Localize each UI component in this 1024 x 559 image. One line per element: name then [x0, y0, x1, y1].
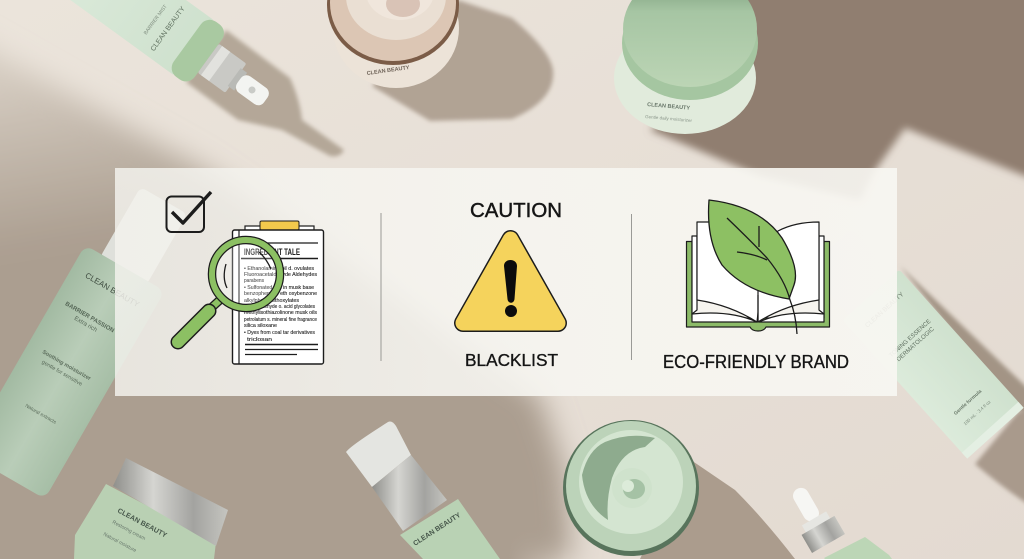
icon: open book with leaf [686, 200, 830, 334]
product: pump bottle, left: Natural extracts [24, 403, 58, 426]
product: airless bottle, bottom center: CLEAN BEAUTY [412, 512, 462, 548]
label: eco-friendly brand: ECO-FRIENDLY BRAND [663, 352, 849, 372]
book cover [686, 242, 830, 331]
clipboard sheet: methylisothiazolinone musk oils [244, 310, 317, 316]
product: tube bottle, right: 100 mL · 3.4 fl oz [963, 399, 992, 426]
product: silver lidded jar, bottom left [74, 458, 228, 559]
magnifying glass [178, 240, 280, 342]
product: beige cream jar, top [327, 0, 553, 121]
clipboard sheet: • Ethanolamine oil d. ovulates [244, 266, 314, 272]
product: pump bottle, left: gentle for sensitive [40, 359, 83, 388]
clipboard sheet: alkylphenol ethoxylates [244, 298, 299, 304]
product: green lidded jar, top right: Gentle daily moisturizer [645, 114, 693, 123]
product: green lidded jar, top right: CLEAN BEAUTY [647, 102, 691, 112]
product: pump bottle, left: Extra rich [73, 316, 98, 334]
icon: warning triangle [463, 239, 558, 323]
clipboard sheet: benzophenone eth oxybenzone [244, 291, 317, 297]
book pages [692, 222, 824, 322]
product: pump bottle, left: CLEAN BEAUTY [84, 271, 141, 310]
icon: checkbox [166, 192, 211, 232]
clipboard sheet: • Sulfonated oils in musk base [244, 285, 314, 291]
clipboard sheet: • Dyes from coal tar derivatives [244, 330, 315, 336]
icon: ingredient clipboard with magnifier [178, 221, 324, 364]
product: dropper bottle, bottom right [781, 479, 892, 559]
clipboard sheet: Fluoroacetaldehyde Aldehydes [244, 272, 317, 278]
product: tube bottle, right: Gentle formula [953, 389, 983, 417]
product: tube bottle, right: TONING ESSENCE [889, 319, 932, 359]
label: blacklist: BLACKLIST [465, 350, 558, 370]
product: open green cream jar, bottom center right [563, 420, 795, 559]
product: green lidded jar, top right [614, 0, 758, 134]
clipboard sheet: petrolatum s. mineral fine fragrance [244, 317, 317, 323]
translucent info panel [115, 168, 897, 396]
product: tube bottle, right: CLEAN BEAUTY [864, 291, 906, 329]
clipboard sheet: silica siloxane [244, 323, 277, 329]
product: silver lidded jar, bottom left: CLEAN BEAUTY [116, 508, 168, 540]
divider left [380, 213, 382, 361]
product: spray bottle, top left: CLEAN BEAUTY [150, 5, 187, 53]
product: silver lidded jar, bottom left: Natural moisture [102, 531, 137, 554]
clipboard sheet: triclosan [247, 337, 272, 343]
product: silver lidded jar, bottom left: Restoring cream [111, 519, 146, 542]
product: spray bottle, top left [39, 0, 344, 156]
product: pump bottle, left: Soothing moisturizer [41, 349, 92, 383]
clipboard sheet: • Formaldehyde o. acid glycolates [244, 304, 315, 310]
clipboard sheet: parabens [244, 278, 264, 284]
product: beige cream jar, top: CLEAN BEAUTY [366, 65, 410, 77]
product: tube bottle, right: DERMATOLOGIC [896, 326, 936, 363]
product: spray bottle, top left: BARRIER MIST [143, 4, 169, 36]
heading: caution: CAUTION [470, 199, 562, 222]
product: tube bottle, right [801, 223, 1024, 512]
leaf [709, 200, 797, 334]
product: pump bottle, left [0, 177, 204, 499]
product: pump bottle, left: BARRIER PASSION [64, 301, 115, 334]
clipboard sheet: INGREDIENT TALE [244, 247, 300, 258]
clipboard sheet [232, 221, 324, 364]
divider right [630, 214, 632, 360]
product: airless bottle, bottom center [346, 422, 500, 559]
